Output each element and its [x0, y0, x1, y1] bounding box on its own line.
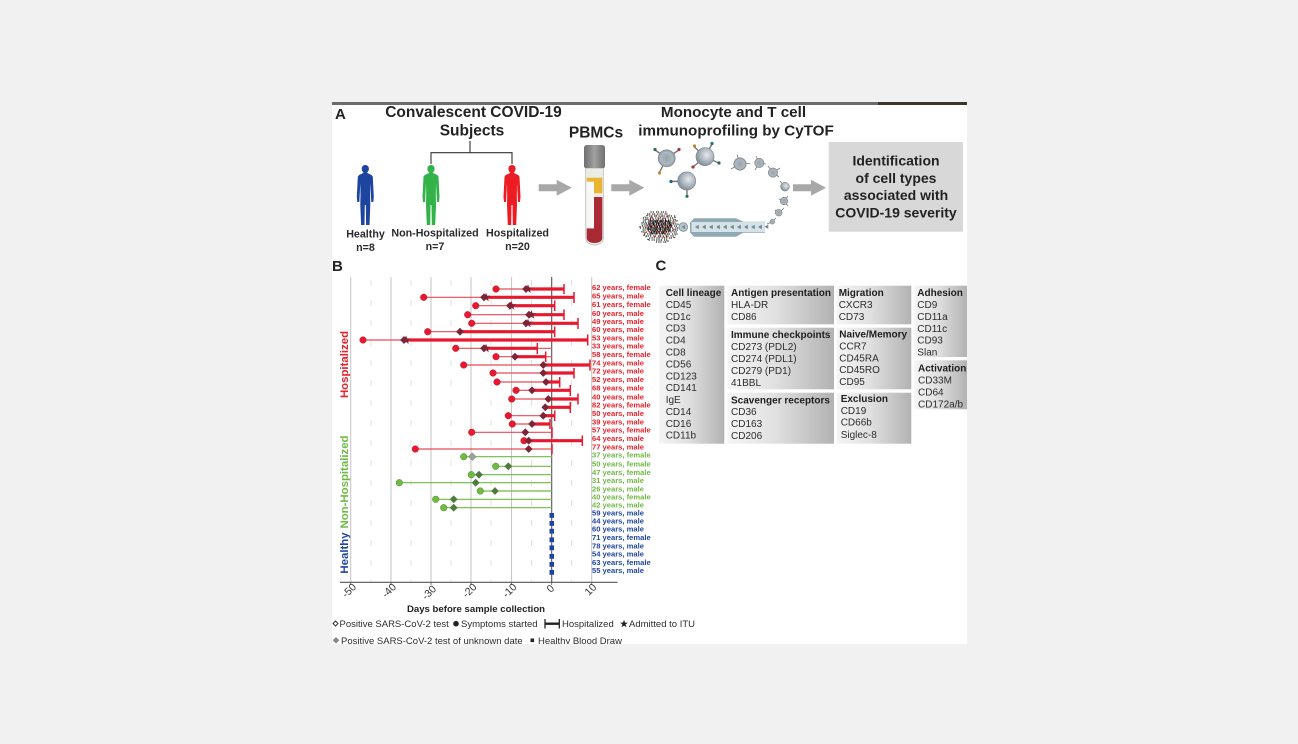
table: Cell lineage: CD1c: [666, 312, 691, 323]
legend: admitted to ITU: Admitted to ITU: [629, 619, 695, 630]
legend: [333, 619, 695, 647]
callout: identification of cell types: [829, 142, 963, 232]
x axis with ticks and labels: [340, 581, 618, 602]
row: 72 years, male: [490, 367, 644, 378]
row: 40 years, male: [508, 392, 644, 404]
row: 72 years, male: 72 years, male: [592, 367, 644, 376]
table: Adhesion: CD93: [917, 336, 943, 347]
heading: Monocyte and T cell immunoprofiling by CyTOF: immunoprofiling by CyTOF: [638, 122, 834, 140]
table: Cell lineage: CD11b: [666, 431, 697, 442]
page margin below figure: [332, 644, 967, 650]
table: Cell lineage: CD56: [666, 360, 692, 370]
row: 58 years, female: [493, 350, 651, 362]
table: Immune checkpoints: 41BBL: [731, 378, 761, 389]
row: 39 years, male: 39 years, male: [592, 417, 644, 426]
table: Activation: Activation: [918, 364, 966, 374]
table: Cell lineage: CD8: [666, 348, 686, 358]
row: 49 years, male: 49 years, male: [592, 317, 644, 326]
bracket linking subject groups: [431, 141, 512, 164]
table: Activation: CD172a/b: [918, 400, 963, 410]
side label: Non-Hospitalized: Non-Hospitalized: [339, 435, 351, 529]
row: 68 years, male: 68 years, male: [592, 384, 644, 393]
x axis with ticks and labels: 10: [583, 581, 599, 598]
row: 53 years, male: 53 years, male: [592, 334, 644, 342]
panel letter C: C: [656, 258, 666, 275]
row: 39 years, male: [509, 417, 644, 429]
panel letter B: B: [332, 258, 343, 275]
panel B: patient timeline chart: [332, 258, 695, 647]
row: 82 years, female: 82 years, female: [592, 401, 651, 410]
label: non-hospitalized n=7: [391, 228, 479, 253]
table: Naive/Memory: [837, 328, 911, 389]
icon: antibody-labelled large cells: [653, 142, 721, 198]
row: 42 years, male: [440, 501, 644, 512]
icon: metal-tagged antibody cloud: [640, 212, 678, 242]
table: Cell lineage: CD123: [666, 371, 697, 382]
table: Immune checkpoints: [727, 328, 834, 389]
table: Migration: CD73: [839, 312, 865, 323]
row: 53 years, male: [360, 334, 644, 346]
panel A: study workflow: [335, 104, 963, 254]
row: 74 years, male: [460, 358, 644, 370]
table: Adhesion: Slan: [917, 348, 937, 359]
row: 52 years, male: 52 years, male: [592, 375, 644, 384]
table: Activation: CD33M: [918, 376, 952, 386]
table: Immune checkpoints: CD274 (PDL1): [731, 354, 797, 365]
table: Exclusion: Siglec-8: [841, 430, 877, 441]
table: Antigen presentation: HLA-DR: [731, 300, 768, 311]
row: 60 years, male: [424, 325, 644, 337]
row: 49 years, male: [468, 317, 644, 329]
table: Exclusion: Exclusion: [841, 394, 888, 405]
row: 77 years, male: 77 years, male: [592, 442, 644, 451]
healthy donor rows: 60 years, male: [592, 524, 644, 534]
callout: identification of cell types: associated with: [844, 187, 948, 203]
table: Immune checkpoints: CD279 (PD1): [731, 366, 791, 377]
label: hospitalized n=20: Hospitalized: [486, 228, 549, 240]
healthy donor rows: 44 years, male: [592, 517, 644, 526]
table: Activation: [914, 360, 967, 410]
table: Cell lineage: CD45: [666, 300, 692, 311]
row: 62 years, female: 62 years, female: [592, 283, 651, 292]
non-hospitalized patient rows: [396, 450, 651, 512]
icon: stream of ionised cells: [731, 154, 789, 224]
label: healthy n=8: n=8: [356, 242, 375, 254]
row: 77 years, male: [412, 442, 644, 454]
icon: mass cytometer chamber: [690, 218, 768, 237]
label: non-hospitalized n=7: n=7: [426, 241, 444, 253]
table: Naive/Memory: CD95: [839, 377, 865, 388]
row: 31 years, male: 31 years, male: [592, 476, 644, 485]
top edge bar: [332, 102, 967, 105]
x axis title: Days before sample collection: [407, 604, 545, 615]
table: Adhesion: CD9: [917, 300, 938, 311]
table: Cell lineage: CD4: [666, 336, 686, 347]
table: Scavenger receptors: CD163: [731, 419, 763, 430]
heading: Monocyte and T cell immunoprofiling by CyTOF: [638, 104, 834, 140]
icon: hospitalized person: [504, 165, 520, 225]
heading: Monocyte and T cell immunoprofiling by CyTOF: Monocyte and T cell: [661, 104, 806, 121]
table: Immune checkpoints: Immune checkpoints: [731, 330, 831, 341]
table: Naive/Memory: CCR7: [839, 342, 867, 352]
row: 42 years, male: 42 years, male: [592, 501, 644, 510]
healthy donor rows: 71 years, female: [592, 533, 651, 542]
row: 52 years, male: [494, 375, 644, 388]
row: 60 years, male: 60 years, male: [592, 325, 644, 334]
row: 40 years, male: 40 years, male: [592, 392, 644, 401]
x axis with ticks and labels: -10: [500, 581, 520, 600]
table: Scavenger receptors: [727, 393, 834, 444]
row: 37 years, female: [460, 450, 651, 461]
hospitalized patient rows: [360, 283, 651, 454]
row: 40 years, female: [432, 493, 651, 503]
table: Migration: CXCR3: [839, 300, 873, 311]
label: healthy n=8: Healthy: [346, 228, 385, 240]
row: 50 years, female: 50 years, female: [592, 460, 651, 468]
row: 74 years, male: 74 years, male: [592, 358, 644, 368]
x axis with ticks and labels: -40: [380, 581, 399, 600]
table: Naive/Memory: Naive/Memory: [839, 330, 908, 340]
table: Adhesion: CD11c: [917, 324, 947, 335]
row: 47 years, female: 47 years, female: [592, 468, 651, 477]
table: Cell lineage: CD14: [666, 407, 692, 418]
table: Exclusion: CD66b: [841, 418, 872, 429]
row: 37 years, female: 37 years, female: [592, 450, 651, 460]
row: 33 years, male: 33 years, male: [592, 342, 644, 351]
row: 64 years, male: 64 years, male: [592, 434, 644, 443]
table: Exclusion: CD19: [841, 406, 867, 417]
healthy donor rows: 55 years, male: [592, 566, 644, 575]
table: Migration: [837, 286, 911, 324]
table: Immune checkpoints: CD273 (PDL2): [731, 342, 797, 353]
heading: Convalescent COVID-19 Subjects: Convalescent COVID-19: [385, 104, 562, 121]
table: Antigen presentation: Antigen presentation: [731, 288, 831, 299]
icon: nebulised droplet: [679, 223, 688, 231]
row: 26 years, male: [477, 484, 644, 495]
table: Scavenger receptors: CD36: [731, 407, 757, 418]
healthy donor rows: 54 years, male: [592, 550, 644, 559]
arrow to PBMCs: [539, 180, 572, 196]
heading: Convalescent COVID-19 Subjects: [385, 104, 562, 140]
label: healthy n=8: [346, 228, 385, 254]
label: non-hospitalized n=7: Non-Hospitalized: [391, 228, 479, 240]
row: 60 years, male: [464, 309, 644, 320]
table: Cell lineage: CD141: [666, 383, 697, 394]
legend: symptoms started: Symptoms started: [461, 619, 538, 630]
callout: identification of cell types: COVID-19 severity: [835, 204, 957, 220]
row: 57 years, female: [468, 425, 651, 438]
table: Scavenger receptors: Scavenger receptors: [731, 396, 830, 406]
table: Cell lineage: IgE: [666, 395, 681, 406]
row: 50 years, male: [505, 409, 644, 421]
table: Naive/Memory: CD45RO: [839, 365, 880, 376]
legend: test of unknown date: Positive SARS-CoV-2 test of unknown date: [341, 636, 523, 647]
row: 57 years, female: 57 years, female: [592, 425, 651, 434]
heading: PBMCs: PBMCs: [569, 124, 623, 142]
icon: healthy person: [357, 165, 374, 225]
row: 65 years, male: [420, 292, 644, 303]
legend: healthy blood draw: Healthy Blood Draw: [538, 636, 622, 647]
row: 61 years, female: 61 years, female: [592, 300, 651, 309]
table: Adhesion: Adhesion: [917, 288, 963, 299]
table: Cell lineage: Cell lineage: [666, 288, 722, 299]
healthy donor rows: [550, 509, 651, 575]
table: Naive/Memory: CD45RA: [839, 354, 879, 364]
table: Antigen presentation: CD86: [731, 312, 757, 323]
table: Exclusion: [837, 393, 911, 444]
callout: identification of cell types: of cell types: [856, 170, 937, 186]
figure background panel: [332, 102, 967, 644]
legend: positive test: Positive SARS-CoV-2 test: [340, 619, 449, 630]
row: 64 years, male: [521, 434, 644, 446]
row: 31 years, male: [396, 476, 644, 487]
row: 33 years, male: [452, 342, 644, 354]
callout: identification of cell types: Identification: [852, 152, 940, 168]
panel C: marker tables: [656, 258, 967, 444]
side label: Hospitalized: Hospitalized: [339, 331, 351, 398]
healthy donor rows: 59 years, male: [592, 509, 644, 518]
label: hospitalized n=20: [486, 228, 549, 253]
table: Migration: Migration: [839, 288, 884, 299]
table: Scavenger receptors: CD206: [731, 431, 763, 442]
icon: blood tube: [584, 145, 605, 245]
icon: non-hospitalized person: [422, 165, 440, 225]
table: Adhesion: [914, 286, 967, 359]
table: Adhesion: CD11a: [917, 312, 948, 323]
x axis with ticks and labels: 0: [545, 582, 557, 595]
x axis with ticks and labels: -50: [340, 581, 359, 600]
healthy donor rows: 63 years, female: [592, 558, 651, 567]
x axis with ticks and labels: -30: [420, 583, 439, 602]
row: 47 years, female: [468, 468, 651, 479]
label: hospitalized n=20: n=20: [505, 241, 530, 253]
x axis with ticks and labels: -20: [460, 581, 480, 600]
arrow to CyTOF: [611, 180, 644, 196]
table: Activation: CD64: [918, 388, 944, 398]
row: 26 years, male: 26 years, male: [592, 484, 644, 493]
table: Cell lineage: CD16: [666, 419, 692, 430]
table: Cell lineage: [659, 286, 724, 444]
healthy donor rows: 78 years, male: [592, 542, 644, 550]
panel letter A: A: [335, 106, 346, 123]
row: 62 years, female: [493, 283, 651, 294]
row: 50 years, female: [492, 460, 651, 470]
heading: Convalescent COVID-19 Subjects: Subjects: [440, 122, 504, 140]
legend: hospitalized: Hospitalized: [562, 619, 614, 630]
side label: Healthy: Healthy: [339, 532, 351, 574]
table: Cell lineage: CD3: [666, 324, 686, 335]
row: 40 years, female: 40 years, female: [592, 493, 651, 502]
row: 82 years, female: [541, 401, 651, 413]
row: 50 years, male: 50 years, male: [592, 409, 644, 418]
arrow to identification box: [793, 180, 826, 196]
row: 58 years, female: 58 years, female: [592, 350, 651, 359]
row: 68 years, male: [513, 384, 644, 396]
row: 60 years, male: 60 years, male: [592, 309, 644, 318]
table: Antigen presentation: [727, 286, 834, 324]
row: 65 years, male: 65 years, male: [592, 292, 644, 300]
row: 61 years, female: [472, 300, 651, 311]
